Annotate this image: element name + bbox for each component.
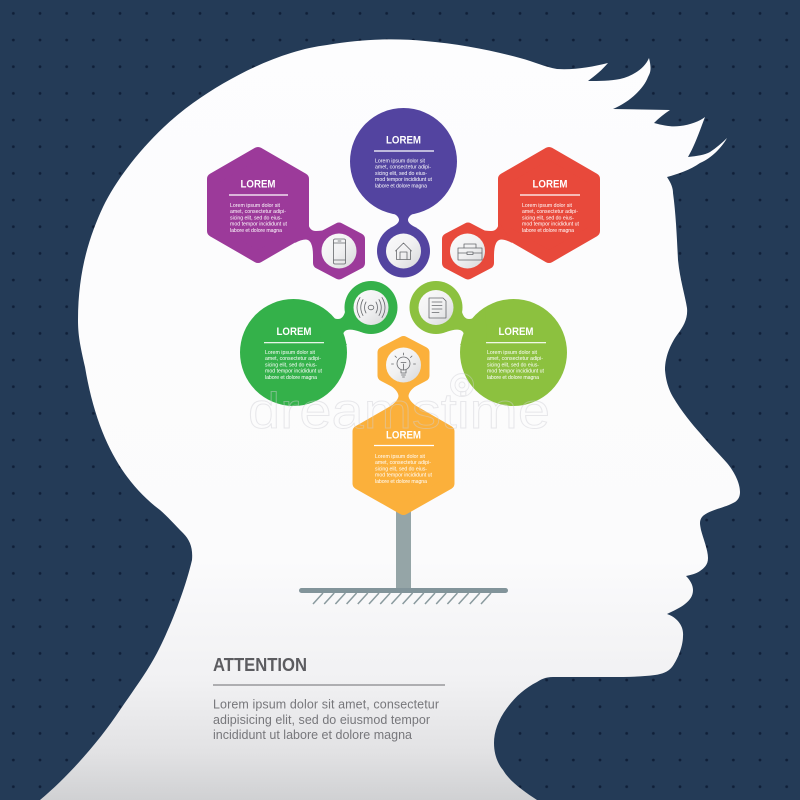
- text block: amet, consectetur adipi-: [375, 460, 431, 466]
- divider: [486, 342, 546, 344]
- text block: amet, consectetur adipi-: [375, 165, 431, 171]
- text block: [375, 158, 433, 190]
- text block: labore et dolore magna: [265, 375, 317, 381]
- text block: Lorem ipsum dolor sit amet, consectetur: [213, 698, 439, 712]
- text block: Lorem ipsum dolor sit: [375, 454, 426, 460]
- text block: amet, consectetur adipi-: [522, 209, 578, 215]
- text block: labore et dolore magna: [375, 479, 427, 485]
- panel: light green circle with document: [410, 281, 567, 406]
- text block: labore et dolore magna: [375, 184, 427, 190]
- text block: [213, 698, 439, 742]
- stem and ground: [299, 505, 508, 604]
- text block: Lorem ipsum dolor sit: [522, 203, 573, 209]
- text block: mod tempor incididunt ut: [375, 472, 433, 478]
- text block: mod tempor incididunt ut: [265, 368, 323, 374]
- heading: LOREM: [532, 178, 568, 190]
- text block: amet, consectetur adipi-: [265, 356, 321, 362]
- watermark: dreamstime: [248, 383, 550, 439]
- text block: sicing elit, sed do eius-: [375, 171, 427, 177]
- text block: sicing elit, sed do eius-: [522, 215, 574, 221]
- divider: [264, 342, 324, 344]
- panel: indigo circle with house: [350, 108, 457, 278]
- text block: sicing elit, sed do eius-: [230, 215, 282, 221]
- text block: mod tempor incididunt ut: [522, 222, 580, 228]
- panel: green circle with signal: [240, 281, 398, 406]
- text block: amet, consectetur adipi-: [487, 356, 543, 362]
- divider: [520, 194, 580, 196]
- panel: purple hexagon with phone: [213, 153, 359, 274]
- heading: LOREM: [498, 326, 534, 338]
- text block: labore et dolore magna: [487, 375, 539, 381]
- panel: red hexagon with briefcase: [448, 153, 594, 274]
- heading: LOREM: [276, 326, 312, 338]
- text block: Lorem ipsum dolor sit: [265, 350, 316, 356]
- callout: attention: [213, 655, 445, 742]
- heading: LOREM: [240, 178, 276, 190]
- text block: labore et dolore magna: [230, 228, 282, 234]
- text block: amet, consectetur adipi-: [230, 209, 286, 215]
- text block: [487, 350, 545, 381]
- text block: adipisicing elit, sed do eiusmod tempor: [213, 713, 430, 727]
- icon: light bulb: [386, 348, 421, 382]
- icon: briefcase: [450, 234, 485, 268]
- text block: [375, 454, 433, 485]
- icon: document: [418, 290, 454, 325]
- heading: LOREM: [386, 134, 421, 146]
- text block: [522, 203, 580, 234]
- text block: sicing elit, sed do eius-: [487, 362, 539, 368]
- divider: [229, 194, 288, 196]
- text block: incididunt ut labore et dolore magna: [213, 728, 412, 742]
- text block: mod tempor incididunt ut: [230, 222, 288, 228]
- text block: Lorem ipsum dolor sit: [375, 158, 426, 164]
- text block: Lorem ipsum dolor sit: [487, 350, 538, 356]
- divider: [213, 684, 445, 686]
- text block: Lorem ipsum dolor sit: [230, 203, 281, 209]
- text block: labore et dolore magna: [522, 228, 574, 234]
- heading: LOREM: [386, 429, 421, 441]
- icon: house: [386, 234, 421, 268]
- text block: [265, 350, 323, 381]
- divider: [374, 150, 434, 152]
- heading: ATTENTION: [213, 655, 307, 675]
- text block: mod tempor incididunt ut: [375, 177, 433, 183]
- icon: signal: [354, 290, 388, 325]
- text block: sicing elit, sed do eius-: [265, 362, 317, 368]
- divider: [374, 444, 434, 446]
- text block: sicing elit, sed do eius-: [375, 466, 427, 472]
- icon: phone: [322, 234, 356, 268]
- text block: [230, 203, 288, 234]
- panel: yellow hexagon with bulb: [358, 342, 448, 509]
- text block: mod tempor incididunt ut: [487, 368, 545, 374]
